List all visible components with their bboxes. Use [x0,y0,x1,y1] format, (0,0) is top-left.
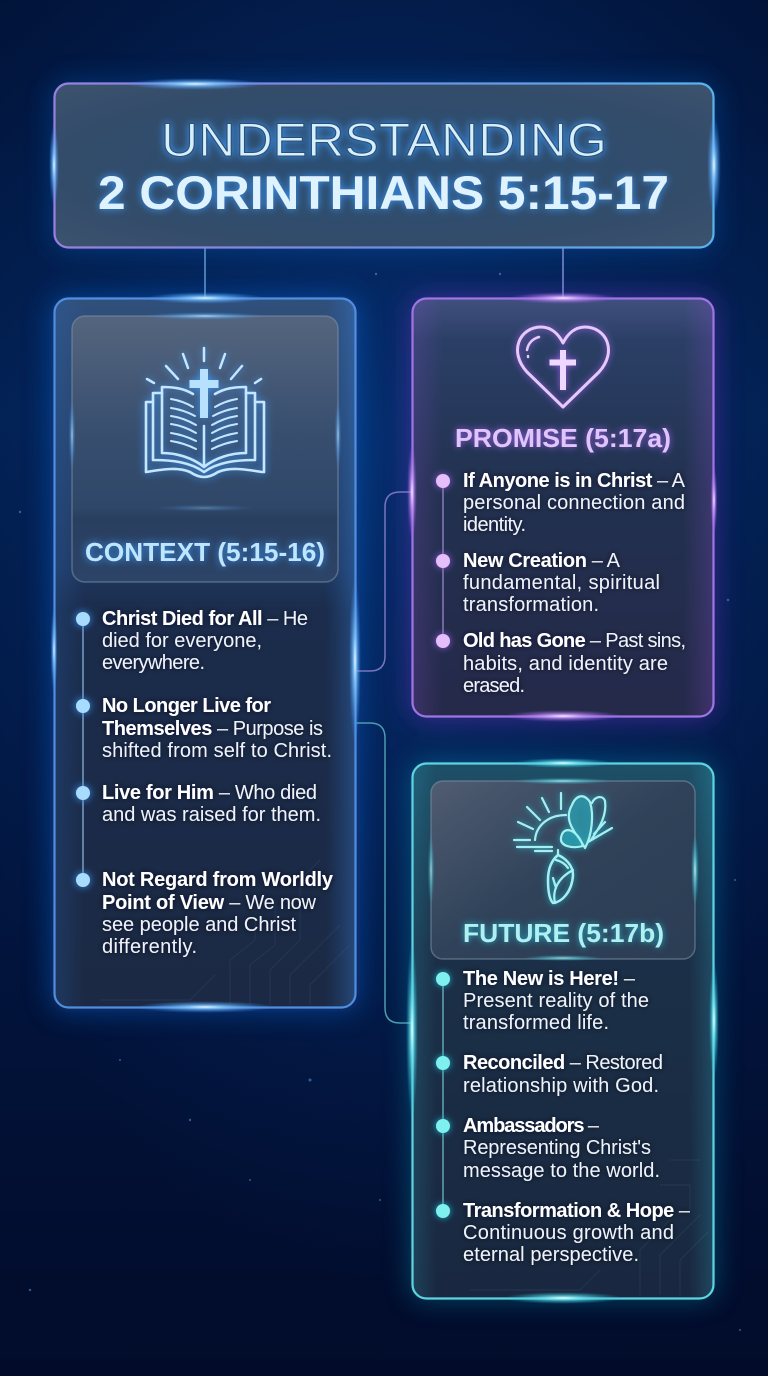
context list text: and was raised for them. [102,804,321,826]
promise list text: New Creation – A [463,550,621,572]
context list text: Point of View – We now [102,892,317,914]
context heading: CONTEXT (5:15-16) [85,537,325,567]
promise list text: fundamental, spiritual [463,572,660,594]
context list text: Themselves – Purpose is [102,718,323,740]
panel glows [50,82,716,1301]
panel: context [50,292,361,1013]
connector: title to promise [562,248,564,298]
future list text: Transformation & Hope – [463,1200,691,1222]
context timeline [76,612,90,887]
context list text: No Longer Live for [102,695,271,717]
future list text: eternal perspective. [463,1244,639,1266]
future list text: Reconciled – Restored [463,1052,663,1074]
promise list text: habits, and identity are [463,653,668,675]
context list text: everywhere. [102,652,205,674]
context list text: died for everyone, [102,630,262,652]
context list text: differently. [102,936,197,958]
circuit decoration [470,1160,708,1295]
promise list text: erased. [463,675,525,697]
promise list text: Old has Gone – Past sins, [463,630,686,652]
icon: open bible with cross [146,348,264,477]
promise list text: If Anyone is in Christ – A [463,470,686,492]
future icon card [428,778,699,961]
promise timeline [436,474,450,648]
promise heading: PROMISE (5:17a) [455,423,671,453]
future list text: Present reality of the [463,990,649,1012]
future list text: relationship with God. [463,1075,659,1097]
future list text: transformed life. [463,1012,609,1034]
promise list text: identity. [463,514,526,536]
future list text: The New is Here! – [463,968,636,990]
context list text: see people and Christ [102,914,296,936]
icon: heart with cross [517,327,609,407]
context list text: Christ Died for All – He [102,608,308,630]
title text: 2 CORINTHIANS 5:15-17 [98,166,669,219]
future list text [463,968,691,1266]
context icon card [68,312,342,582]
future timeline [436,972,450,1218]
promise list text [463,470,686,697]
future heading: FUTURE (5:17b) [463,918,664,948]
title text: UNDERSTANDING [161,113,607,166]
context list text [102,608,334,958]
promise list text: transformation. [463,594,599,616]
panel: promise [407,292,718,722]
panel: future [406,758,719,1304]
future list text: Ambassadors – [463,1115,600,1137]
icon: sun, butterfly and chrysalis [514,793,612,903]
context list text: Live for Him – Who died [102,782,317,804]
circuit decoration [100,860,350,1005]
connector: title to context [204,248,206,298]
title panel [49,78,721,248]
connector: context to future [356,723,412,1023]
context list text: shifted from self to Christ. [102,740,332,762]
future list text: message to the world. [463,1160,660,1182]
context list text: Not Regard from Worldly [102,869,334,891]
connector: context to promise [356,492,412,671]
title text [98,113,669,219]
future list text: Representing Christ's [463,1137,651,1159]
promise list text: personal connection and [463,492,685,514]
future list text: Continuous growth and [463,1222,674,1244]
